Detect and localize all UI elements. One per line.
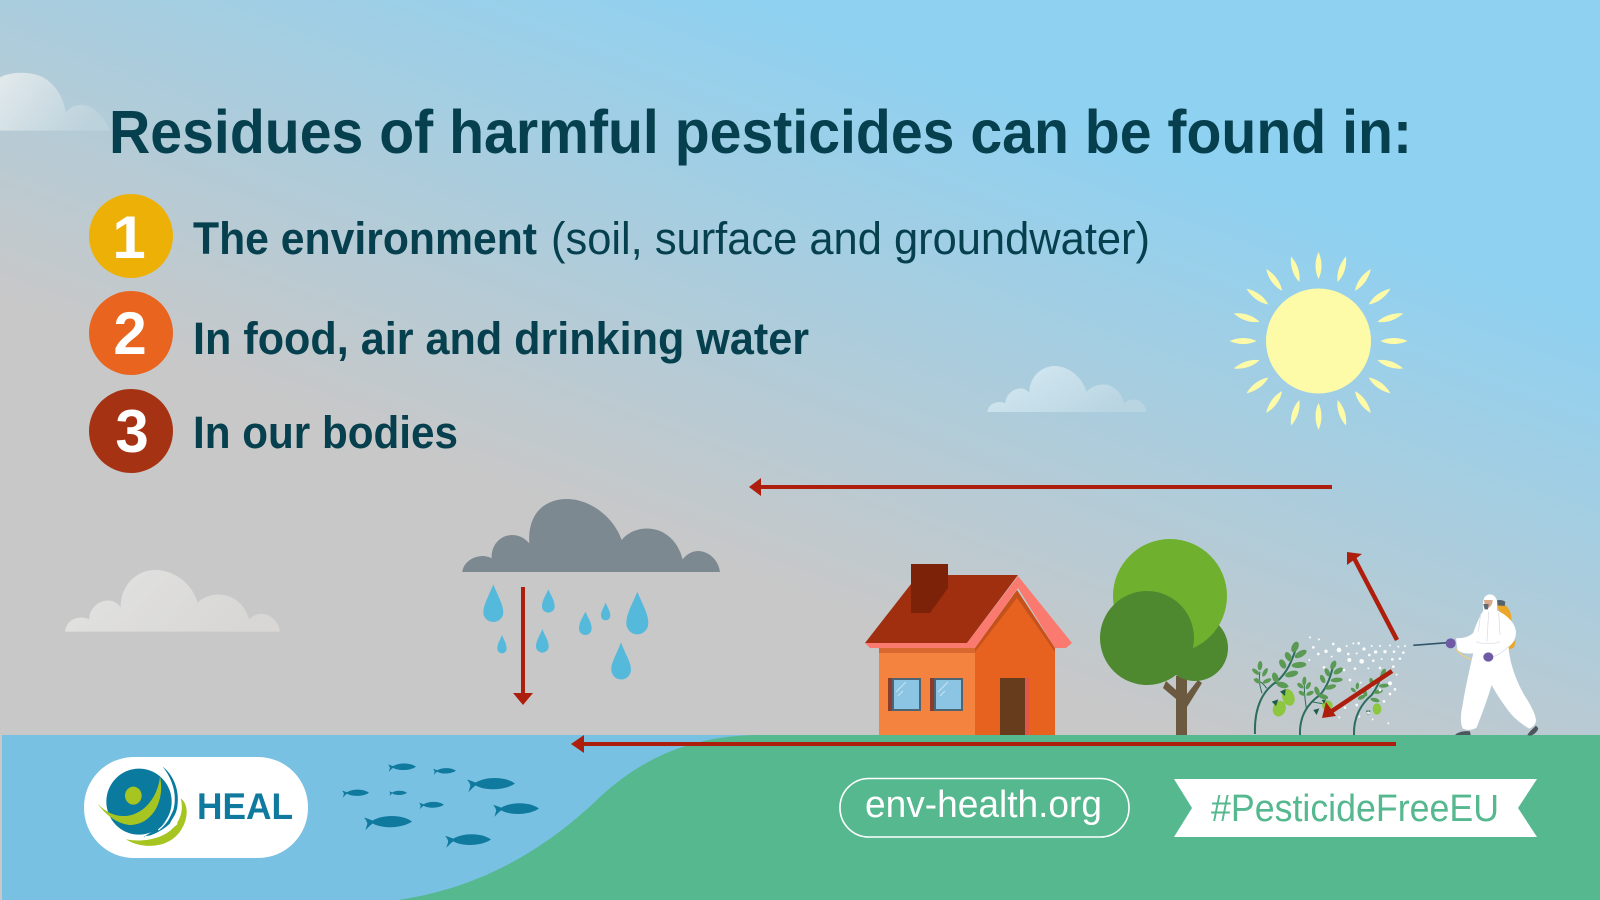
icon: rain cloud with drops: [462, 499, 720, 679]
window right: [930, 678, 963, 711]
text: food, air and drinking water: In food, air and drinking water: [193, 313, 809, 364]
logo emblem: [97, 767, 187, 846]
protective suit: [1456, 594, 1536, 730]
gloves: [1446, 638, 1456, 648]
icon: cloud lower left: [65, 570, 280, 632]
logo: HEAL: [84, 757, 308, 858]
badge 2: 2: [113, 300, 147, 367]
panel: water: [2, 735, 1600, 900]
face and mask: [1484, 600, 1493, 609]
logo wordmark: HEAL: [197, 786, 293, 827]
badge 3: 3: [115, 398, 149, 465]
website pill: [840, 778, 1129, 837]
glove right: [1483, 652, 1493, 662]
hashtag banner: [1174, 779, 1537, 837]
badge 3: [89, 389, 173, 473]
window left: [888, 678, 921, 711]
illustration: worker in protective suit: [1446, 594, 1538, 736]
boots: [1455, 726, 1538, 736]
arrow: evaporation up arrow: [1347, 552, 1397, 640]
badge 1: 1: [112, 204, 146, 271]
arrow: rain down arrow: [513, 587, 533, 705]
text: the environment: (soil, surface and groundwater): [551, 213, 1150, 264]
title: Residues of harmful pesticides can be found in:: [109, 98, 1412, 166]
backpack sprayer: [1497, 604, 1516, 650]
hashtag banner: #PesticideFreeEU: [1211, 788, 1499, 830]
chimney: [911, 564, 948, 613]
plant 3: [1350, 668, 1389, 735]
list item 1: [89, 194, 1150, 278]
plant 1: [1251, 640, 1308, 734]
list item 3: [89, 389, 458, 473]
trunk: [1163, 676, 1202, 735]
icon: sun: [1230, 252, 1408, 430]
house left wall: [879, 645, 975, 735]
hose: [1456, 649, 1475, 661]
roof: [865, 575, 1018, 643]
rain cloud: [462, 499, 720, 572]
pesticide spray droplets: [1309, 637, 1406, 724]
icon: tree: [1100, 539, 1228, 735]
illustration: plants and spray: [1251, 637, 1447, 735]
roof edge: [865, 576, 1072, 648]
arrow: long upper arrow: [749, 478, 1332, 496]
rain drops: [483, 584, 648, 679]
front foliage: [1100, 591, 1194, 685]
top foliage: [1113, 539, 1227, 653]
website pill: env-health.org: [865, 784, 1102, 826]
icon: cloud near sun: [987, 366, 1147, 412]
icon: house: [865, 564, 1072, 735]
logo pill background: [84, 757, 308, 858]
house gable wall: [975, 590, 1055, 735]
suit seams: [1476, 612, 1508, 657]
text: the environment: The environment: [193, 213, 537, 264]
badge 2: [89, 291, 173, 375]
icon: cloud top left: [0, 73, 110, 131]
text: in our bodies: In our bodies: [193, 407, 458, 458]
panel: green ground: [398, 735, 1600, 900]
badge 1: [89, 194, 173, 278]
arrow: long lower arrow over ground: [571, 735, 1396, 753]
spray lance: [1413, 643, 1447, 645]
icon: fish shoal: [342, 763, 539, 848]
plant 2: [1296, 660, 1344, 735]
back foliage: [1162, 615, 1228, 681]
door: [1000, 678, 1029, 735]
arrow: drift down arrow: [1322, 671, 1392, 718]
list item 2: [89, 291, 809, 375]
